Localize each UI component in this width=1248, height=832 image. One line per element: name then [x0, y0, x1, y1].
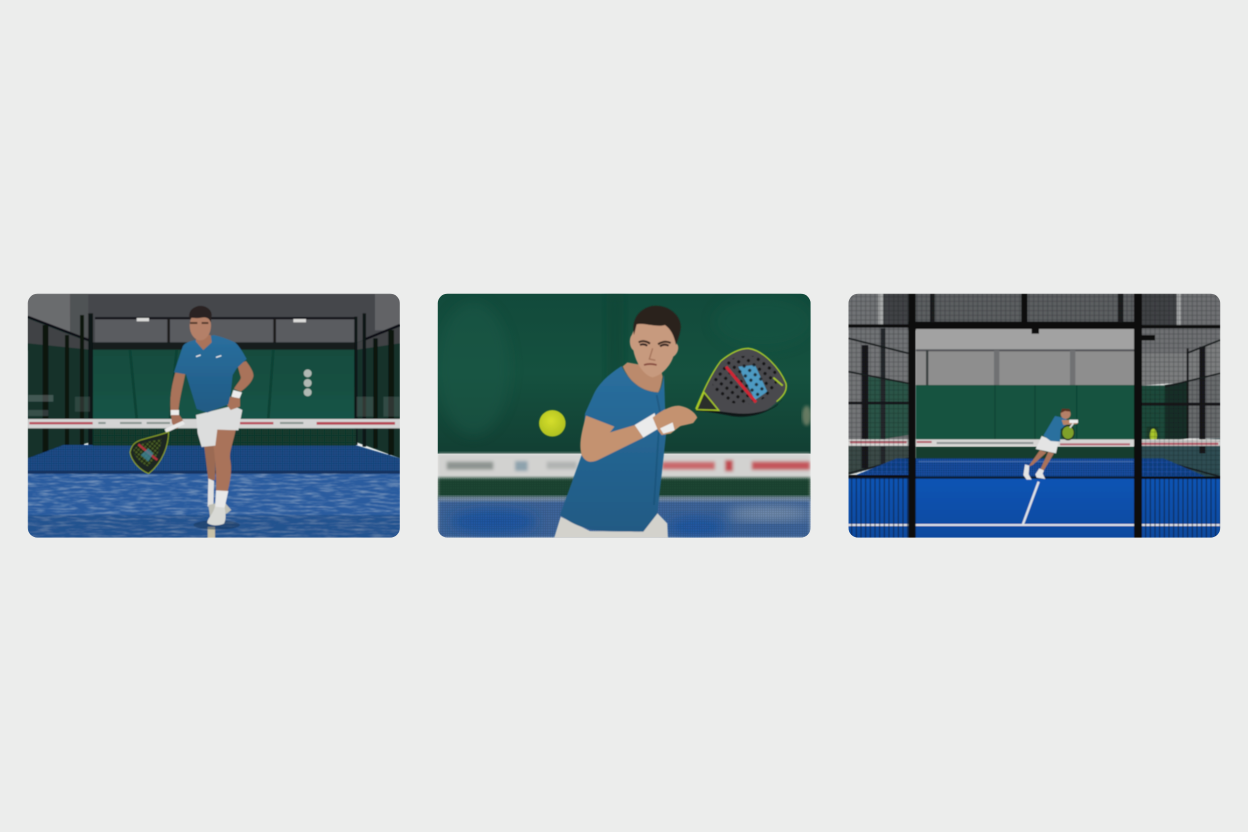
shorts [554, 512, 668, 538]
photo 1: player walking on court with racket [28, 294, 400, 539]
net banner [28, 419, 400, 428]
blurred net banner [438, 454, 811, 478]
racket [165, 422, 184, 431]
front sock [215, 490, 228, 509]
black cage frame [848, 294, 1220, 538]
far court [848, 458, 1210, 478]
net banner [848, 439, 1220, 446]
side cage panels [848, 328, 1220, 477]
far arm [234, 361, 253, 392]
forearm [580, 416, 643, 462]
neck and head [196, 335, 212, 350]
neck [623, 362, 663, 392]
shorts [196, 406, 242, 447]
player 3 [1023, 409, 1078, 480]
tennis ball [539, 410, 566, 437]
shirt body [560, 366, 666, 532]
far court [28, 428, 400, 475]
blurred green curtain background [437, 294, 813, 454]
hand [653, 406, 697, 435]
blurred net and court [438, 478, 813, 538]
shorts [1036, 436, 1058, 453]
grip [660, 422, 675, 434]
face features [639, 341, 671, 344]
hall wall upper [848, 294, 1220, 386]
fence mesh [848, 294, 1220, 538]
head [1061, 409, 1071, 419]
socks and shoes [1023, 464, 1032, 480]
racket [696, 348, 786, 417]
head [630, 323, 678, 377]
player 1 [130, 306, 253, 525]
wristband [635, 413, 659, 438]
back leg [204, 444, 216, 480]
green back curtain [93, 350, 356, 446]
hair [633, 306, 681, 345]
back sock and shoe [208, 478, 214, 507]
photo 2: close-up of player about to hit ball [437, 294, 813, 538]
near arm [170, 372, 185, 412]
front shoe [207, 507, 226, 525]
photo triptych [28, 294, 1220, 538]
legs [1028, 450, 1047, 467]
right side cage [354, 313, 400, 458]
racket [1061, 425, 1075, 440]
arm [1062, 420, 1077, 425]
near court surface [28, 474, 400, 539]
shirt [174, 335, 247, 413]
shirt [1043, 416, 1067, 442]
front leg [213, 428, 236, 492]
green back curtain [916, 385, 1134, 459]
spare racket against fence [1147, 427, 1158, 443]
player 2 [554, 306, 786, 538]
hall ceiling and back wall [28, 294, 400, 350]
photo 3: wide shot through the cage [848, 294, 1220, 538]
near court [848, 476, 1220, 538]
left side cage [28, 313, 93, 458]
